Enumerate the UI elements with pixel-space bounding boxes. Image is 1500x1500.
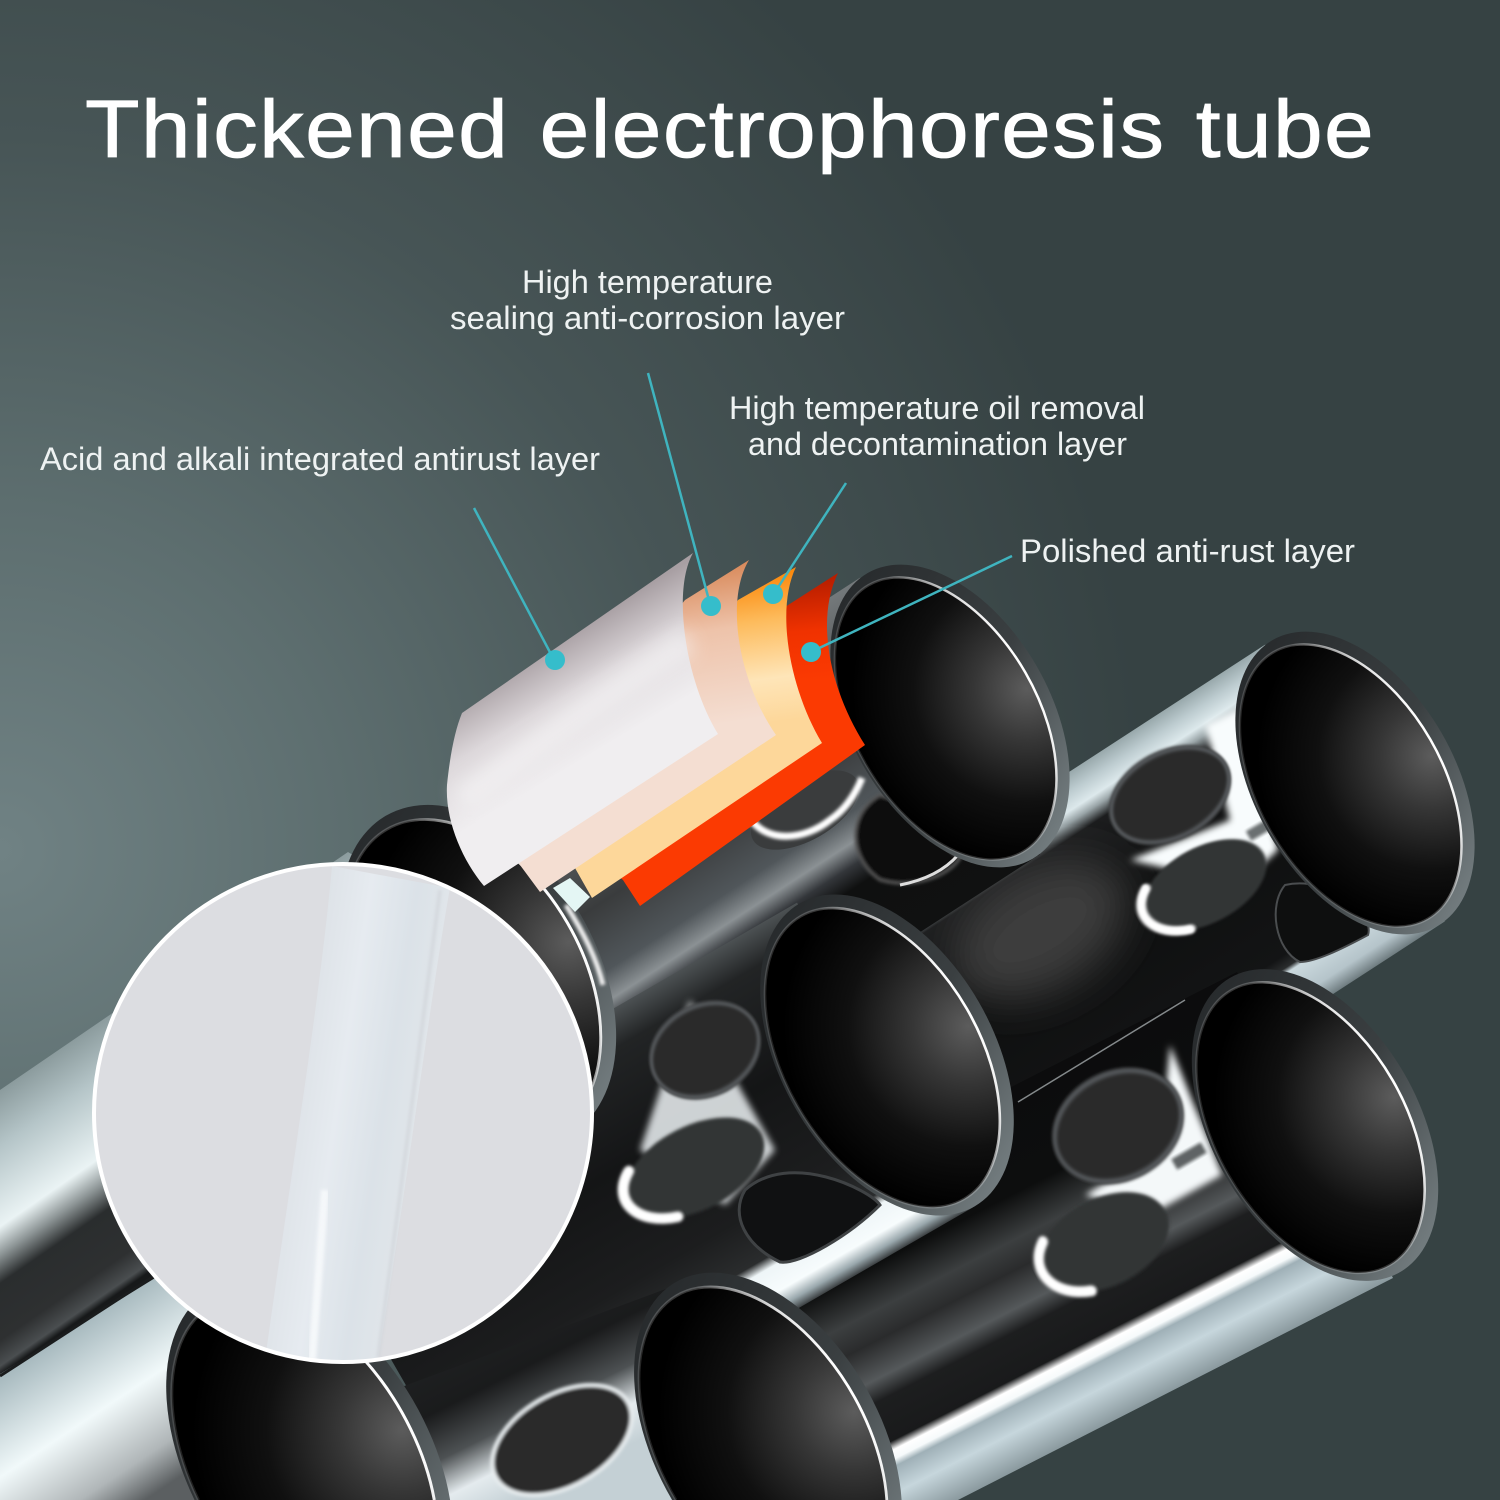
label: oil removal layer: and decontamination layer (748, 426, 1127, 462)
reflections on lower right tube (1018, 1000, 1222, 1313)
title: Thickened electrophoresis tube (85, 84, 1375, 175)
callout leader: polished layer (801, 556, 1012, 662)
label: sealing layer: High temperature (522, 264, 773, 300)
reflections on upper right tube (918, 705, 1369, 1029)
tube: behind magnifier (283, 756, 673, 1194)
layer: red polished anti-rust (600, 573, 865, 906)
magnifier circle: coating close-up (94, 864, 592, 1362)
label: sealing layer (450, 264, 845, 336)
layer: pale strip (553, 878, 590, 912)
label: polished layer: Polished anti-rust layer (1020, 533, 1355, 569)
rim: bottom center tube (634, 1273, 902, 1500)
tube: center (295, 851, 1066, 1497)
label: oil removal layer: High temperature oil removal (729, 390, 1145, 426)
label: oil removal layer (729, 390, 1145, 462)
reflections on top tube (738, 754, 960, 885)
layer: orange oil removal (560, 567, 822, 898)
layered coating sheets (447, 553, 865, 912)
callout leader: oil removal layer (763, 483, 846, 604)
reflections on center tube (608, 982, 880, 1262)
tube: bottom left (166, 1280, 450, 1500)
coated tube close-up (265, 866, 450, 1360)
tube: upper right (661, 590, 1500, 1314)
tube: bottom center (380, 1273, 902, 1500)
tube: long left body (0, 852, 620, 1500)
reflection on bottom center tube (473, 1362, 651, 1500)
callout leader: antirust layer (474, 508, 565, 670)
layer: white antirust (447, 553, 718, 886)
tube: top with layered coating (390, 523, 1119, 1159)
label: sealing layer: sealing anti-corrosion layer (450, 300, 845, 336)
callout leader: sealing layer (648, 373, 721, 616)
tube: lower right (524, 926, 1489, 1500)
label: antirust layer: Acid and alkali integrated antirust layer (40, 441, 600, 477)
layer: peach sealing (500, 560, 776, 892)
